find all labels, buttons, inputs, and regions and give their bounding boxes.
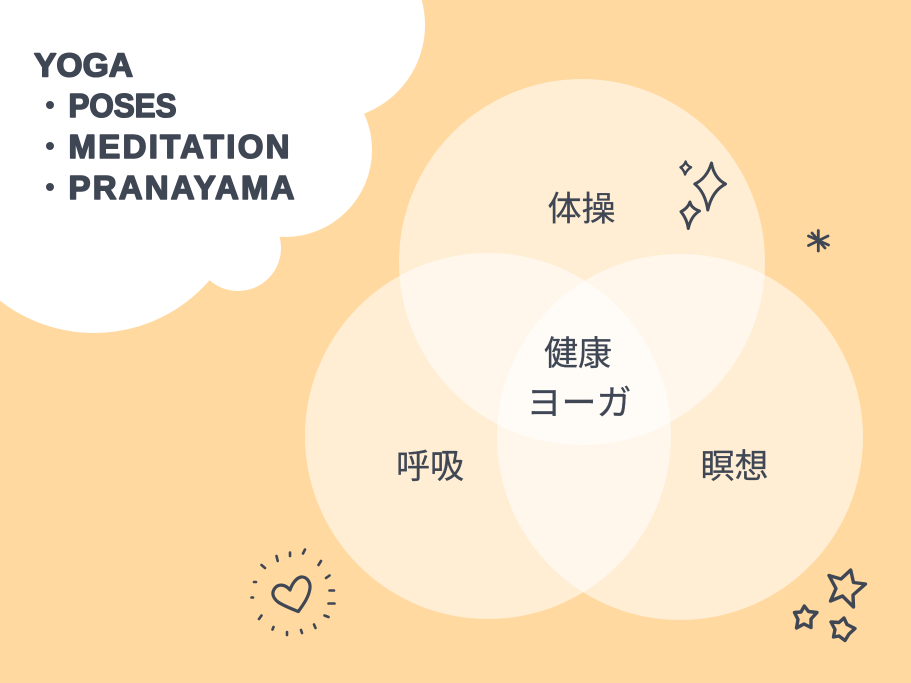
label: exercise: 体操 [548,190,616,228]
list item: meditation: MEDITATION [68,128,290,165]
heart [273,577,310,612]
circle: meditation [497,254,863,620]
icon: heart with rays [252,550,334,635]
label: breathing: 呼吸 [396,448,464,486]
list item: pranayama: PRANAYAMA [68,169,294,206]
venn diagram [305,79,863,620]
list item: poses: POSES [68,87,176,124]
label: meditation: 瞑想 [700,448,768,486]
icon: sparkles [680,162,726,228]
lower right star [831,618,855,640]
rays [252,550,334,635]
label: center line 1: 健康 [544,335,612,373]
circle: breathing [305,253,671,619]
icon: asterisk [808,230,828,251]
cloud panel [0,0,425,333]
small left star [794,606,817,628]
heading: yoga: YOGA [34,46,133,84]
venn labels [396,190,768,486]
icon: stars [794,570,866,640]
circle: exercise [399,79,765,445]
large star [829,570,866,607]
heading and list [34,46,294,206]
label: center line 2: ヨーガ [526,384,632,423]
